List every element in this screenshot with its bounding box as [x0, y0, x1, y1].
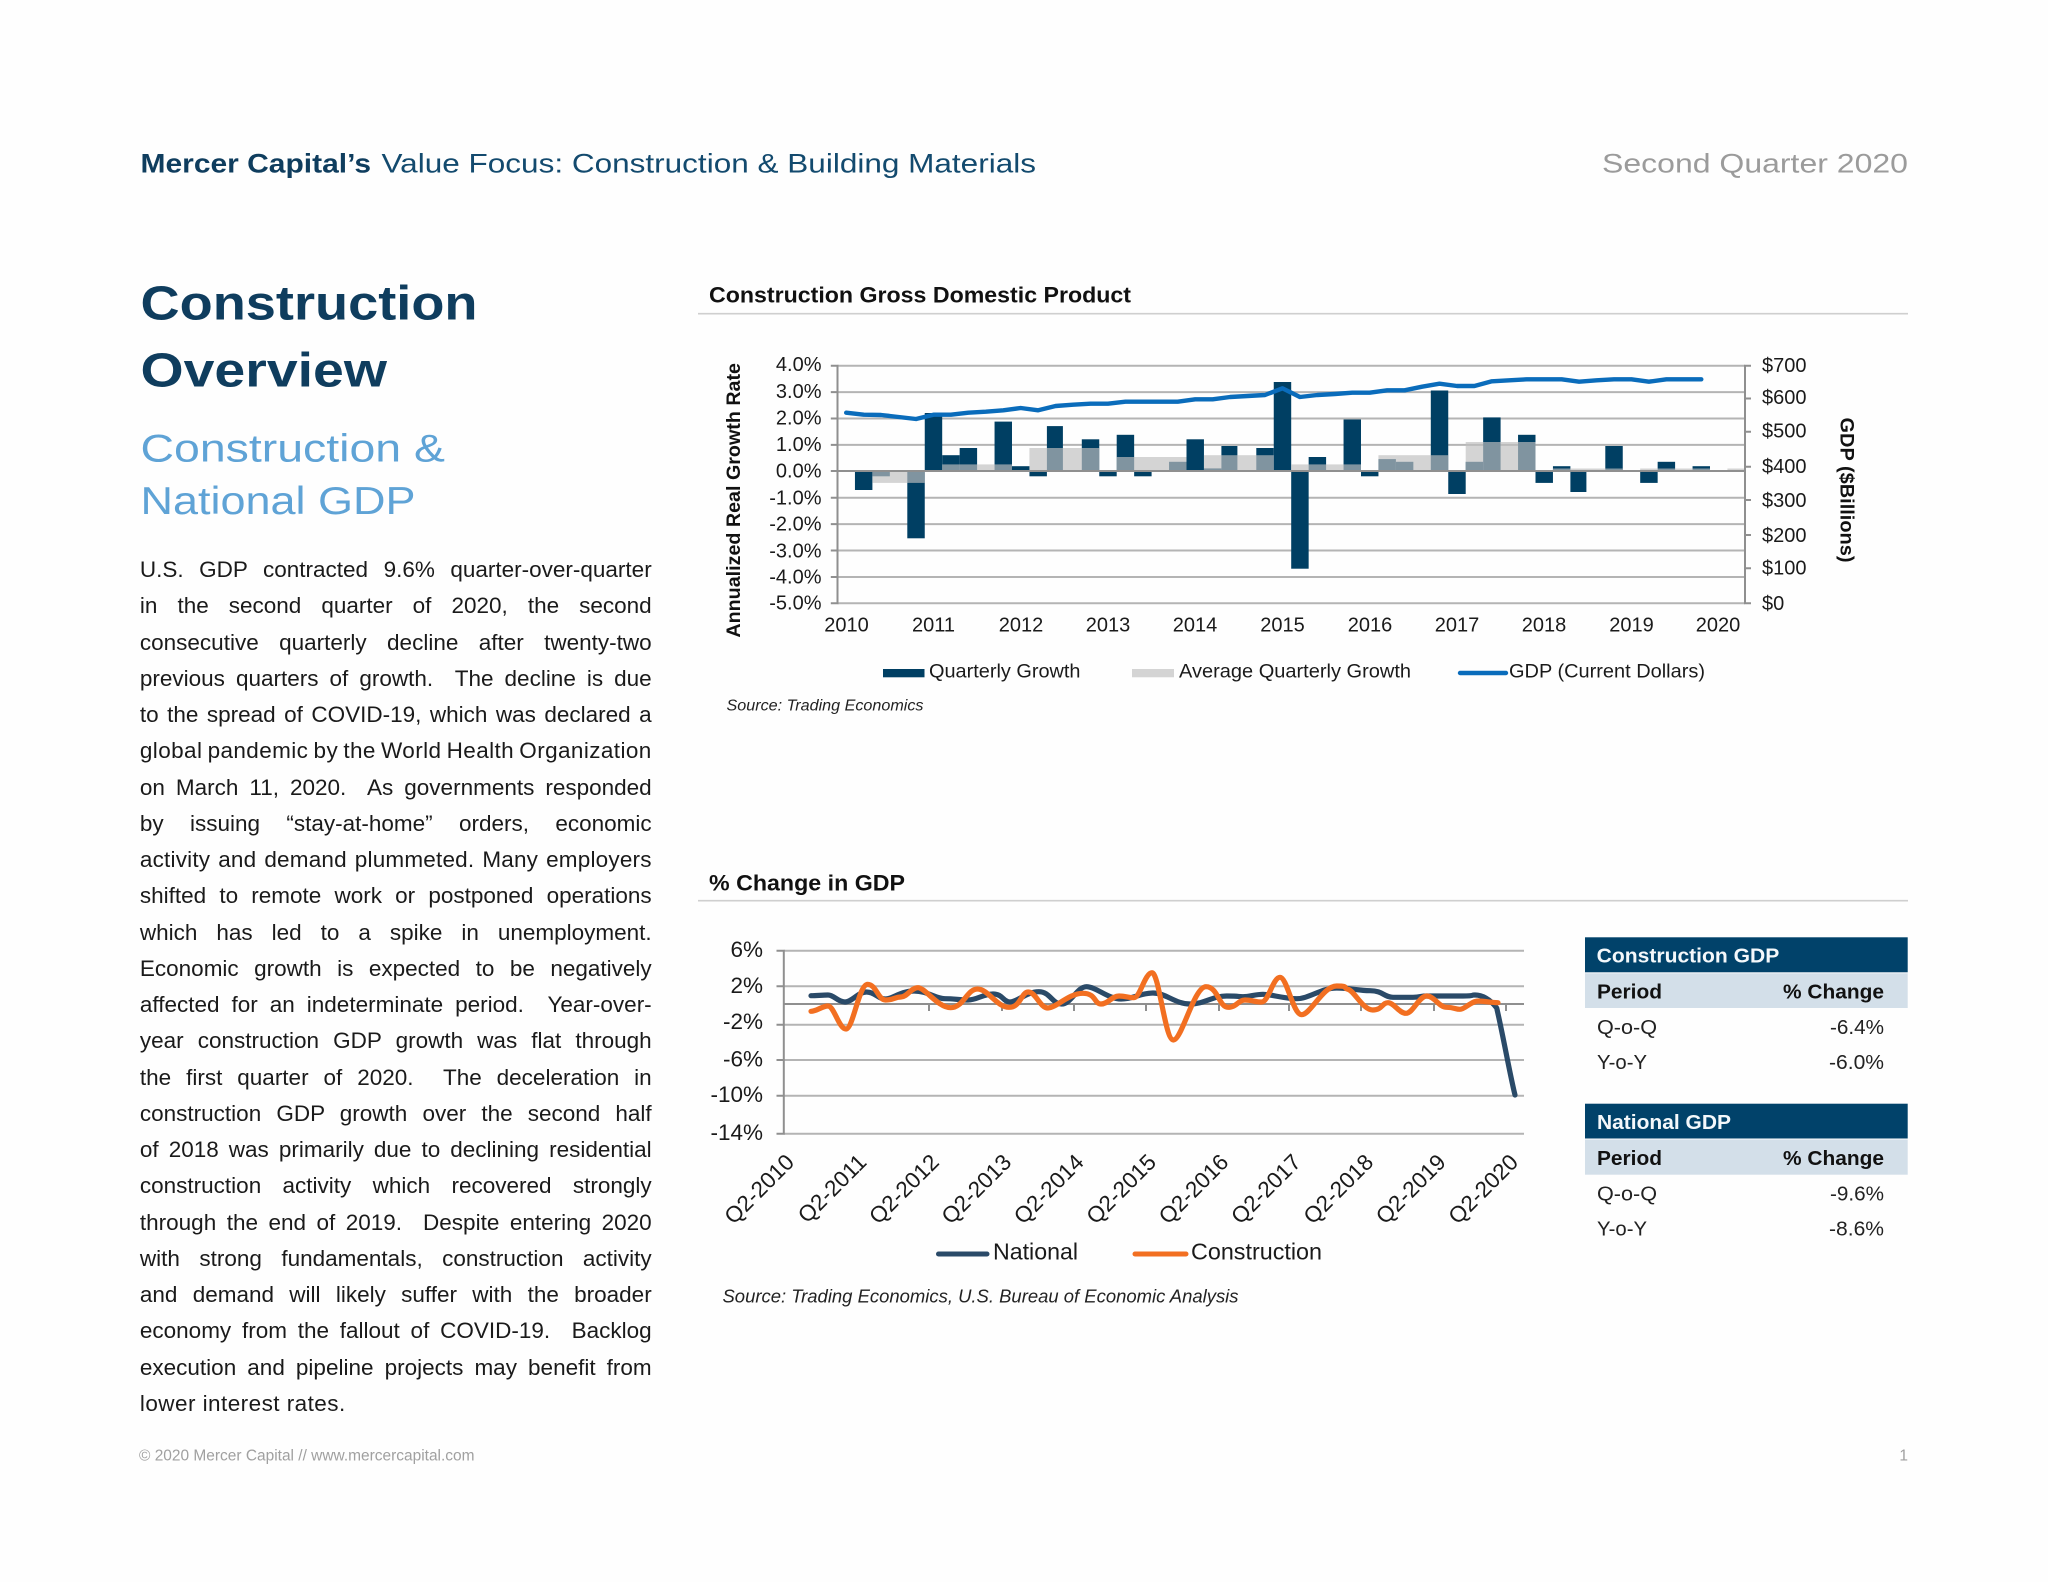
- footer: [139, 1448, 1908, 1465]
- title: [140, 276, 478, 398]
- y axis labels: -6%: [723, 1046, 763, 1072]
- y axis labels: -2%: [723, 1009, 763, 1034]
- table: construction GDP: Construction GDP: [1597, 944, 1779, 967]
- y axis labels: 2%: [730, 973, 763, 998]
- body text: the first quarter of 2020. The deceleration in: [140, 1065, 652, 1090]
- left axis labels: 1.0%: [776, 434, 822, 456]
- rotated x axis labels: Q2-2014: [1009, 1149, 1089, 1229]
- right axis labels: $400: [1762, 456, 1806, 478]
- body text: [140, 557, 652, 1416]
- rotated x axis labels: Q2-2018: [1299, 1149, 1378, 1229]
- table: national GDP: Y-o-Y: [1597, 1218, 1647, 1241]
- right axis labels: [1762, 355, 1806, 615]
- y axis title right: GDP ($Billions): [1836, 418, 1856, 562]
- source note: Source: Trading Economics, U.S. Bureau of Economic Analysis: [722, 1287, 1238, 1307]
- table: construction GDP: -6.0%: [1829, 1051, 1884, 1074]
- table: construction GDP: Period: [1597, 980, 1662, 1003]
- construction line: [811, 973, 1498, 1040]
- x axis years: 2013: [1086, 615, 1130, 637]
- legend: [883, 660, 1705, 682]
- left axis labels: -2.0%: [769, 514, 822, 536]
- table: national GDP: % Change: [1783, 1147, 1884, 1170]
- page header: Value Focus: Construction & Building Materials: [382, 149, 1036, 179]
- body text: of 2018 was primarily due to declining residential: [140, 1137, 652, 1162]
- title: Construction: [140, 276, 478, 330]
- body text: U.S. GDP contracted 9.6% quarter-over-quarter: [140, 557, 652, 582]
- table: national GDP: Period: [1597, 1147, 1662, 1170]
- body text: affected for an indeterminate period. Year-over-: [140, 992, 652, 1017]
- chart: percent change in GDP: [710, 937, 1524, 1307]
- legend: Quarterly Growth: [929, 660, 1080, 682]
- right axis labels: $0: [1762, 593, 1784, 615]
- body text: to the spread of COVID-19, which was declared a: [140, 702, 652, 727]
- right axis labels: $500: [1762, 421, 1806, 443]
- legend: Construction: [1191, 1238, 1322, 1264]
- body text: in the second quarter of 2020, the second: [140, 593, 652, 618]
- subtitle: [140, 428, 445, 523]
- GDP line: [846, 379, 1701, 419]
- table: construction GDP: Y-o-Y: [1597, 1051, 1647, 1074]
- table: construction GDP: [1585, 937, 1908, 1074]
- left axis labels: 3.0%: [776, 381, 822, 403]
- table: national GDP: National GDP: [1597, 1111, 1731, 1134]
- rotated x axis labels: Q2-2020: [1443, 1149, 1523, 1229]
- rotated x axis labels: Q2-2017: [1226, 1149, 1306, 1229]
- table: national GDP: [1585, 1104, 1908, 1241]
- body text: year construction GDP growth was flat through: [140, 1028, 652, 1053]
- chart: construction GDP bars and line: [724, 354, 1856, 715]
- x axis years: 2012: [999, 615, 1043, 637]
- table: construction GDP: Q-o-Q: [1597, 1016, 1657, 1039]
- body text: by issuing “stay-at-home” orders, economic: [140, 811, 652, 836]
- y axis labels: [710, 937, 763, 1145]
- legend: National: [993, 1238, 1078, 1264]
- right axis labels: $700: [1762, 355, 1806, 377]
- left axis labels: -5.0%: [769, 592, 822, 614]
- table: national GDP: -8.6%: [1829, 1218, 1884, 1241]
- rotated x axis labels: Q2-2011: [793, 1149, 871, 1228]
- x axis years: [824, 615, 1740, 637]
- body text: through the end of 2019. Despite entering 2020: [140, 1210, 652, 1235]
- body text: shifted to remote work or postponed operations: [140, 883, 652, 908]
- page header: [140, 149, 1908, 179]
- rotated x axis labels: Q2-2010: [719, 1149, 799, 1229]
- left axis labels: -3.0%: [769, 540, 822, 562]
- left axis labels: -4.0%: [769, 566, 822, 588]
- legend: [938, 1238, 1322, 1264]
- y axis labels: 6%: [730, 937, 763, 962]
- body text: previous quarters of growth. The decline is due: [140, 666, 652, 691]
- table: national GDP: -9.6%: [1830, 1183, 1884, 1206]
- x axis years: 2014: [1173, 615, 1217, 637]
- right axis labels: $300: [1762, 490, 1806, 512]
- page header: Second Quarter 2020: [1602, 149, 1908, 179]
- page header: Mercer Capital’s: [140, 149, 371, 179]
- body text: construction GDP growth over the second half: [140, 1101, 652, 1126]
- x axis years: 2015: [1260, 615, 1305, 637]
- body text: with strong fundamentals, construction activity: [140, 1246, 652, 1271]
- title: Overview: [140, 344, 387, 398]
- rotated x axis labels: Q2-2013: [937, 1149, 1016, 1229]
- y axis title left: Annualized Real Growth Rate: [724, 363, 745, 638]
- rotated x axis labels: Q2-2016: [1154, 1149, 1233, 1229]
- x axis years: 2016: [1348, 615, 1392, 637]
- x axis years: 2017: [1435, 615, 1479, 637]
- body text: lower interest rates.: [140, 1391, 346, 1416]
- national line: [811, 987, 1515, 1095]
- rotated x axis labels: [719, 1149, 1523, 1229]
- heading: construction gross domestic product: Construction Gross Domestic Product: [709, 283, 1132, 308]
- left axis labels: 2.0%: [776, 408, 822, 430]
- x axis years: 2020: [1696, 615, 1740, 637]
- rotated x axis labels: Q2-2015: [1081, 1149, 1161, 1229]
- left axis labels: -1.0%: [769, 487, 822, 509]
- legend: GDP (Current Dollars): [1509, 660, 1705, 682]
- body text: and demand will likely suffer with the broader: [140, 1282, 652, 1307]
- heading: percent change in GDP: % Change in GDP: [709, 870, 905, 896]
- x axis years: 2018: [1522, 615, 1566, 637]
- left axis labels: 0.0%: [776, 460, 822, 482]
- source note: Source: Trading Economics: [726, 698, 924, 715]
- left axis labels: 4.0%: [776, 354, 822, 376]
- body text: activity and demand plummeted. Many employers: [140, 847, 652, 872]
- body text: global pandemic by the World Health Organization: [140, 738, 652, 763]
- subtitle: National GDP: [140, 480, 416, 523]
- right axis labels: $200: [1762, 525, 1806, 547]
- footer: 1: [1899, 1448, 1908, 1465]
- rotated x axis labels: Q2-2012: [864, 1149, 944, 1229]
- x axis years: 2011: [912, 615, 955, 637]
- quarterly growth bars: [855, 382, 1710, 569]
- body text: on March 11, 2020. As governments responded: [140, 775, 652, 800]
- right axis labels: $100: [1762, 558, 1806, 580]
- y axis labels: -14%: [710, 1120, 763, 1145]
- average quarterly growth bars: [872, 442, 1745, 483]
- x axis years: 2019: [1609, 615, 1654, 637]
- left axis labels: [769, 354, 822, 614]
- table: construction GDP: -6.4%: [1830, 1016, 1884, 1039]
- body text: Economic growth is expected to be negatively: [140, 956, 652, 981]
- body text: economy from the fallout of COVID-19. Backlog: [140, 1318, 652, 1343]
- body text: which has led to a spike in unemployment.: [140, 920, 652, 945]
- y axis labels: -10%: [710, 1082, 763, 1107]
- rotated x axis labels: Q2-2019: [1371, 1149, 1451, 1229]
- right axis labels: $600: [1762, 387, 1806, 409]
- table: construction GDP: % Change: [1783, 980, 1884, 1003]
- body text: execution and pipeline projects may benefit from: [140, 1355, 652, 1380]
- body text: construction activity which recovered strongly: [140, 1173, 652, 1198]
- footer: © 2020 Mercer Capital // www.mercercapital.com: [139, 1448, 474, 1465]
- subtitle: Construction &: [140, 428, 445, 471]
- body text: consecutive quarterly decline after twenty-two: [140, 630, 652, 655]
- table: national GDP: Q-o-Q: [1597, 1183, 1657, 1206]
- x axis years: 2010: [824, 615, 869, 637]
- legend: Average Quarterly Growth: [1179, 660, 1411, 682]
